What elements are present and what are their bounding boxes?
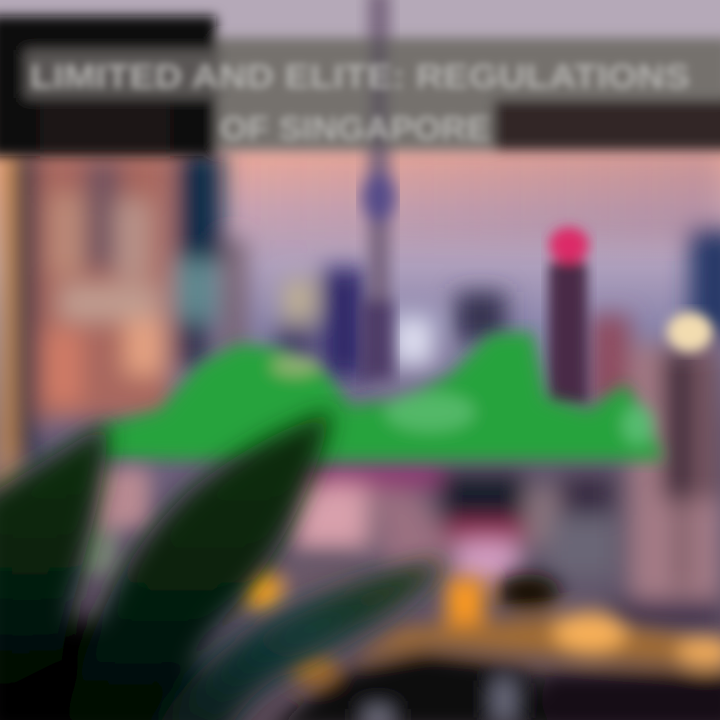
skyline and buildings — [0, 150, 720, 626]
leaf: far left — [0, 422, 108, 700]
title banner — [0, 16, 720, 156]
leaf: center tall — [60, 410, 332, 720]
skyline: right foreground tower — [610, 345, 720, 626]
foreground building: warm window panel — [36, 150, 172, 420]
chart highlights — [385, 392, 475, 432]
skyline: dark tower with pink top — [549, 227, 589, 405]
city lights — [242, 570, 282, 610]
banner: block shapes — [0, 16, 720, 156]
city lights and lower foreground — [80, 468, 720, 720]
bottom dark shapes — [540, 672, 720, 720]
patch between palm leaves — [90, 468, 150, 528]
skyline: central spire tower — [360, 0, 396, 380]
background: right-side sky shade — [240, 150, 720, 240]
leaf mass at base — [0, 620, 200, 720]
leaf: low right — [150, 560, 445, 720]
skyline: glowing tower top — [667, 312, 713, 352]
title text: LIMITED AND ELITE: REGULATIONS — [30, 58, 690, 96]
title text: OF SINGAPORE — [220, 110, 490, 148]
foreground plant: palm leaves — [0, 410, 445, 720]
foreground building: dark columns — [0, 150, 246, 495]
skyline: distant towers and city — [276, 230, 720, 405]
skyline: lower city blocks — [230, 462, 650, 602]
title text — [30, 58, 690, 148]
green mountain-shaped area chart — [100, 332, 664, 460]
